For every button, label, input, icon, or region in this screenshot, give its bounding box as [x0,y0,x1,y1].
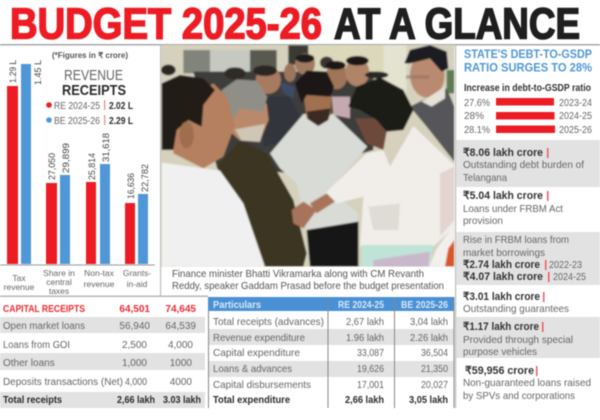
table header [208,297,454,311]
table rows: Deposits transactions (Net) [3,377,123,388]
table total row: Total receipts [3,395,62,406]
category labels [4,268,151,296]
right standing man [410,88,454,162]
stat: rise in FRBM loans: ₹2.74 lakh crore [463,259,540,271]
table rows: 56,940 [119,321,150,332]
stat: outstanding guarantees: Outstanding guarantees [463,303,569,315]
table rows [213,316,448,391]
right front man [325,126,454,247]
table total row [3,395,201,406]
stat: outstanding guarantees [463,291,569,315]
table total row: 2,66 lakh [345,394,384,406]
bar chart: 25,814 [87,153,98,180]
stat: rise in FRBM loans: 2022-23 [549,259,582,271]
category labels: Grants- [123,268,151,278]
photo caption: Reddy, speaker Gaddam Prasad before the budget presentation [172,280,444,292]
bar chart: 27,050 [47,153,58,180]
panel: revenue receipts chart [0,51,155,296]
photo caption: Finance minister Bhatti Vikramarka along with CM Revanth [172,268,424,280]
stat: FRBM loans: Loans under FRBM Act [463,203,563,215]
centre man [270,114,367,232]
stat: rise in FRBM loans: 2024-25 [553,271,586,283]
stat: rise in FRBM loans: ₹4.07 lakh crore [463,271,543,283]
stat: FRBM loans: ₹5.04 lakh crore [463,190,543,202]
stat: non-guaranteed loans: by SPVs and corporations [463,390,575,402]
table rows: 19,626 [357,363,384,375]
stat: non-guaranteed loans: ₹59,956 crore [465,365,534,377]
sidebar heading: RATIO SURGES TO 28% [464,60,592,74]
table total row: 2,66 lakh [117,395,155,406]
table rows: 4,000 [168,340,193,351]
panel: expenditure table [208,297,454,408]
table total row: 3.03 lakh [163,395,201,406]
stat: outstanding debt [456,140,600,187]
category labels: Non-tax [84,268,115,278]
table header row: CAPITAL RECEIPTS [3,304,85,315]
bar chart: 29,899 [61,143,72,173]
stat: rise in FRBM loans [456,232,600,285]
photo caption [172,268,444,292]
table total row: Total expenditure [213,394,290,406]
photo: finance minister and delegation [160,40,460,270]
table rows: 3,04 lakh [410,316,448,328]
title [10,0,580,48]
table header: Particulars [213,300,261,311]
table header row: 74,645 [165,304,196,315]
stat: rise in FRBM loans: Rise in FRBM loans from [463,234,569,246]
stat: non-guaranteed loans [463,365,591,402]
grey haired man [217,140,307,267]
stat: FRBM loans: provision [463,215,503,227]
stat: special purpose vehicles [456,317,600,358]
stat: outstanding debt: Outstanding debt burden of [463,159,584,171]
chart heading [62,67,126,99]
category labels: central [46,277,72,287]
panel: capital receipts table [0,304,205,408]
bar chart [0,60,155,266]
stat: special purpose vehicles: Provided through special [463,334,573,346]
table rows: 17,001 [357,379,384,391]
category labels: in-aid [127,279,148,289]
debt ratio bars: 27.6% [464,98,490,109]
bar chart: 1.29 L [8,60,19,83]
legend [46,100,133,127]
table rows: 20,027 [421,379,448,391]
background heads [161,65,176,75]
table rows: 1,000 [122,358,147,369]
table rows: 2.26 lakh [410,332,448,344]
bar chart: 16,636 [126,173,137,199]
panel: debt to GSDP sidebar [456,47,600,402]
table rows: 36,504 [421,347,448,359]
table rows: 1000 [170,358,192,369]
bar chart: 22,782 [140,164,151,192]
table rows: 4,000 [125,377,147,388]
category labels: taxes [49,286,69,296]
debt ratio bars: 2024-25 [559,111,592,122]
debt ratio bars: 28% [464,111,484,122]
stat: non-guaranteed loans: Non-guaranteed loans raised [463,377,591,389]
category labels: Tax [12,273,26,283]
table rows: Capital expenditure [213,347,300,359]
table rows: 2,500 [122,340,147,351]
table rows: 2,67 lakh [346,316,384,328]
stat: outstanding debt: ₹8.06 lakh crore [463,147,543,159]
bar chart: 31,618 [101,133,112,162]
table header: RE 2024-25 [338,300,384,311]
chart heading: RECEIPTS [62,82,126,99]
table header: BE 2025-26 [401,300,448,311]
table rows [3,321,196,388]
table rows: Revenue expenditure [213,332,305,344]
stat: FRBM loans [463,190,563,227]
legend: RE 2024-25 [54,101,100,112]
table rows: 64,539 [165,321,196,332]
debt ratio bars: 2025-26 [559,125,592,136]
stat: special purpose vehicles: ₹1.17 lakh crore [463,321,539,333]
chart note: (*Figures in ₹ crore) [52,51,128,60]
legend: 2.02 L [109,101,133,112]
stat: rise in FRBM loans: market borrowings [463,247,545,259]
table rows: Loans & advances [213,363,292,375]
table header row [3,304,196,315]
table rows: Other loans [3,358,55,369]
category labels: revenue [84,279,115,289]
table rows: Loans from GOI [3,340,70,351]
stat: outstanding debt: Telangana [463,172,507,184]
table rows: 4000 [170,377,192,388]
sidebar heading [464,47,592,74]
table rows: Open market loans [3,321,85,332]
category labels: Share in [43,268,75,278]
debt ratio bars [464,83,592,136]
title: BUDGET 2025-26 [10,0,322,48]
chart heading: REVENUE [64,67,123,84]
bar chart: 1.45 L [33,60,44,85]
left man [162,163,265,267]
debt ratio bars: 28.1% [464,125,490,136]
table rows: 33,087 [357,347,384,359]
table rows: Capital disbursements [213,379,311,391]
legend: BE 2025-26 [54,116,100,127]
legend: 2.29 L [109,116,133,127]
table rows: Total receipts (advances) [213,316,324,328]
table rows: 1.96 lakh [346,332,384,344]
table total row [213,394,448,406]
stat: outstanding guarantees: ₹3.01 lakh crore [463,291,540,303]
table header row: 64,501 [119,304,150,315]
table rows: 21,350 [421,363,448,375]
stat: special purpose vehicles: purpose vehicles [463,346,537,358]
debt ratio bars: 2023-24 [559,98,592,109]
table total row: 3,05 lakh [409,394,448,406]
category labels: revenue [4,282,35,292]
